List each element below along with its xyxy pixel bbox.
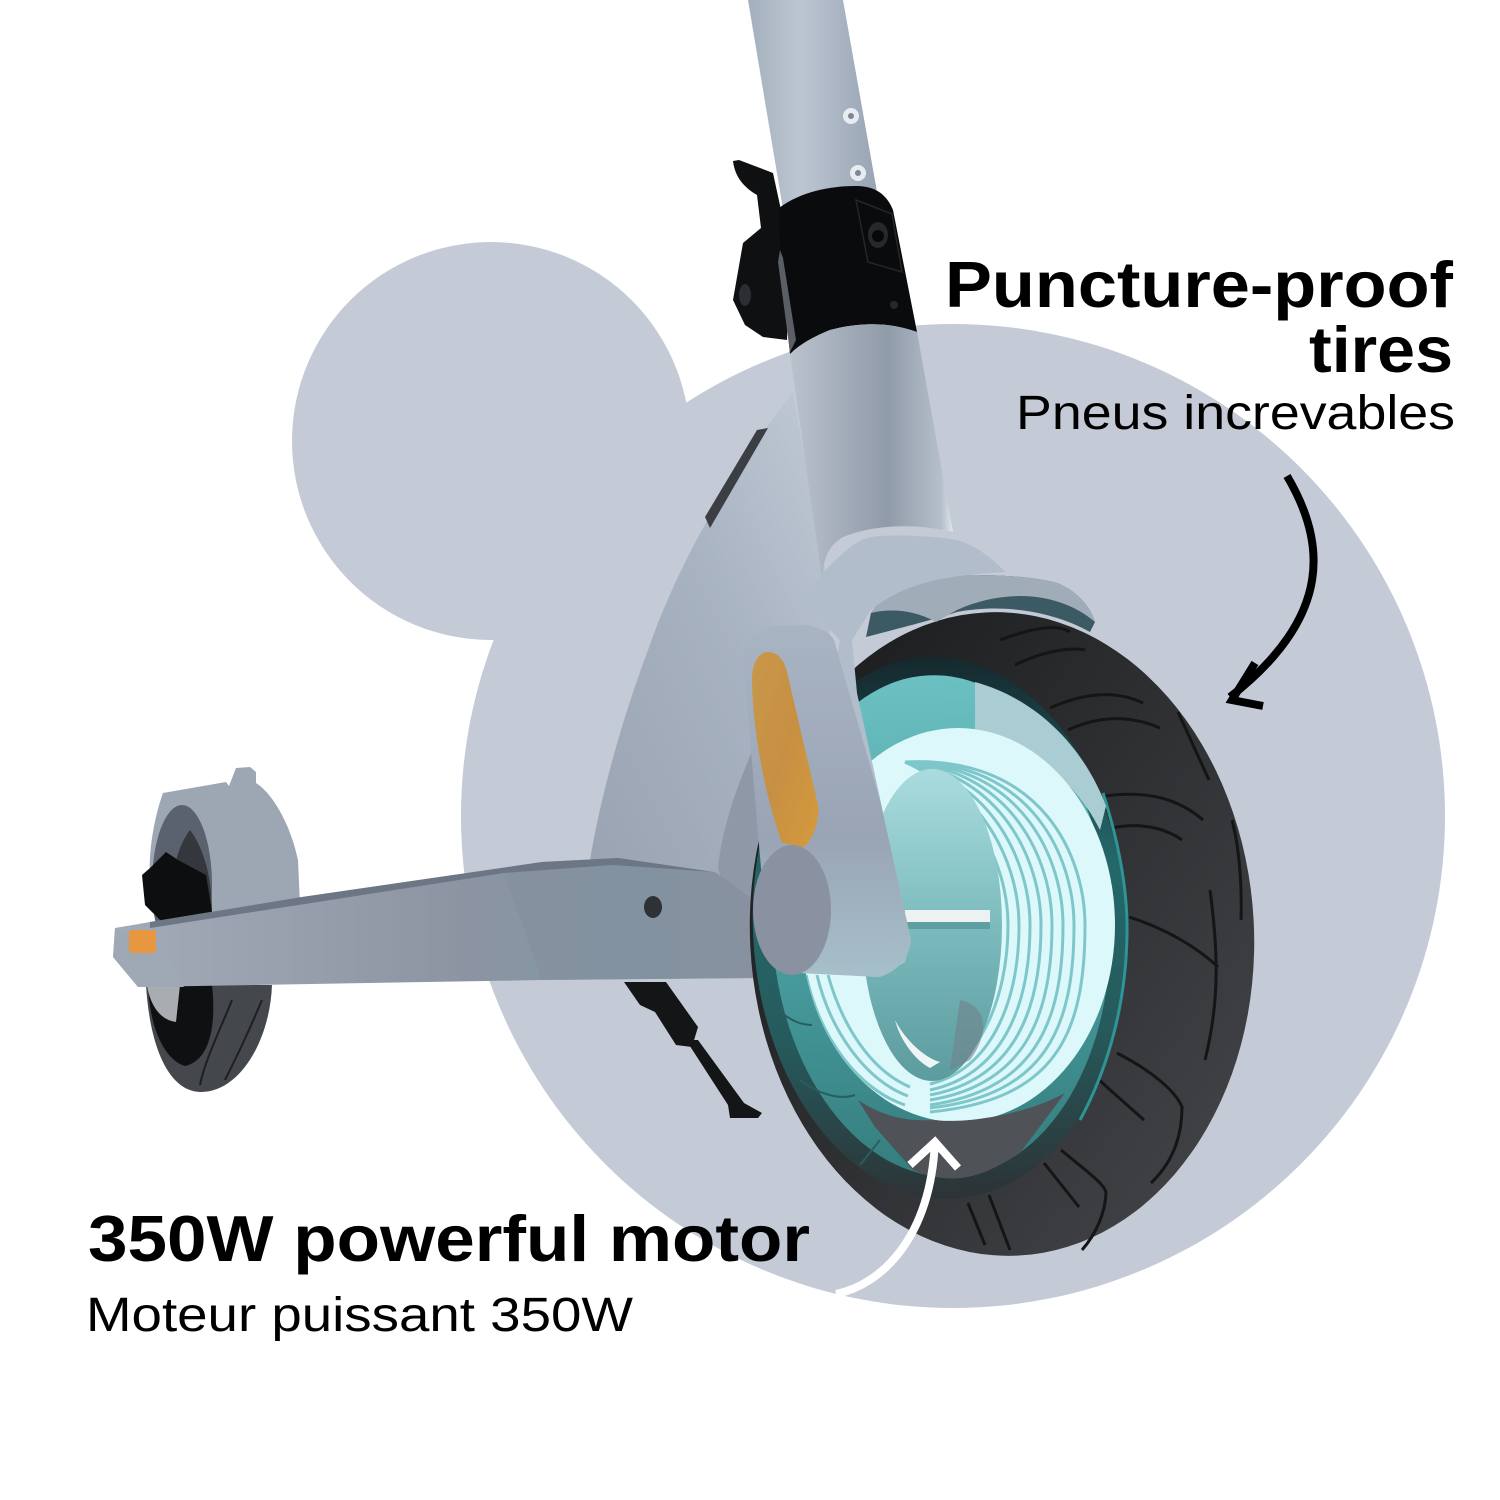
heading: tires: tires xyxy=(1309,313,1453,386)
fork shoulder and arm xyxy=(790,536,1005,977)
rear part of front fender xyxy=(718,747,770,902)
rear wheel xyxy=(142,767,300,1092)
white arrow: motor xyxy=(836,1142,958,1294)
background blob: small circle xyxy=(292,242,690,640)
background blob: large circle xyxy=(461,324,1445,1308)
side buttons xyxy=(705,428,768,528)
deck hole xyxy=(644,896,662,918)
front reflector xyxy=(752,652,818,847)
deck xyxy=(113,858,760,987)
heading: motor: 350W powerful motor xyxy=(88,1202,810,1275)
grey wedge under motor xyxy=(858,1093,1065,1178)
tire tread xyxy=(968,627,1241,1250)
brake lever and clamp xyxy=(733,160,790,340)
tire sidewall ring xyxy=(739,648,1141,1208)
rear reflector xyxy=(129,930,156,953)
front fender xyxy=(866,575,1095,637)
deck top edge xyxy=(150,858,714,928)
glass area top right xyxy=(975,682,1106,830)
heading: tires xyxy=(945,248,1453,386)
brake caliper xyxy=(142,852,212,925)
subheading: tires: Pneus increvables xyxy=(1016,387,1455,440)
axle cap xyxy=(753,845,831,975)
motor coil stripes xyxy=(806,762,1085,1112)
front tire xyxy=(733,599,1271,1269)
fork lower arm xyxy=(743,625,911,977)
motor inner disc xyxy=(862,769,1002,1081)
scooter stem: upper xyxy=(748,0,877,215)
black collar xyxy=(778,186,917,354)
frame arm xyxy=(590,392,830,885)
lower stem xyxy=(790,324,953,578)
subheading: motor: Moteur puissant 350W xyxy=(86,1289,634,1342)
heading: tires: Puncture-proof xyxy=(945,248,1453,321)
axle xyxy=(905,910,990,922)
black arrow: tires xyxy=(1230,476,1314,706)
rear tire xyxy=(146,985,272,1092)
motor glow xyxy=(801,728,1115,1122)
kickstand xyxy=(624,982,762,1118)
rear fender xyxy=(150,767,300,925)
